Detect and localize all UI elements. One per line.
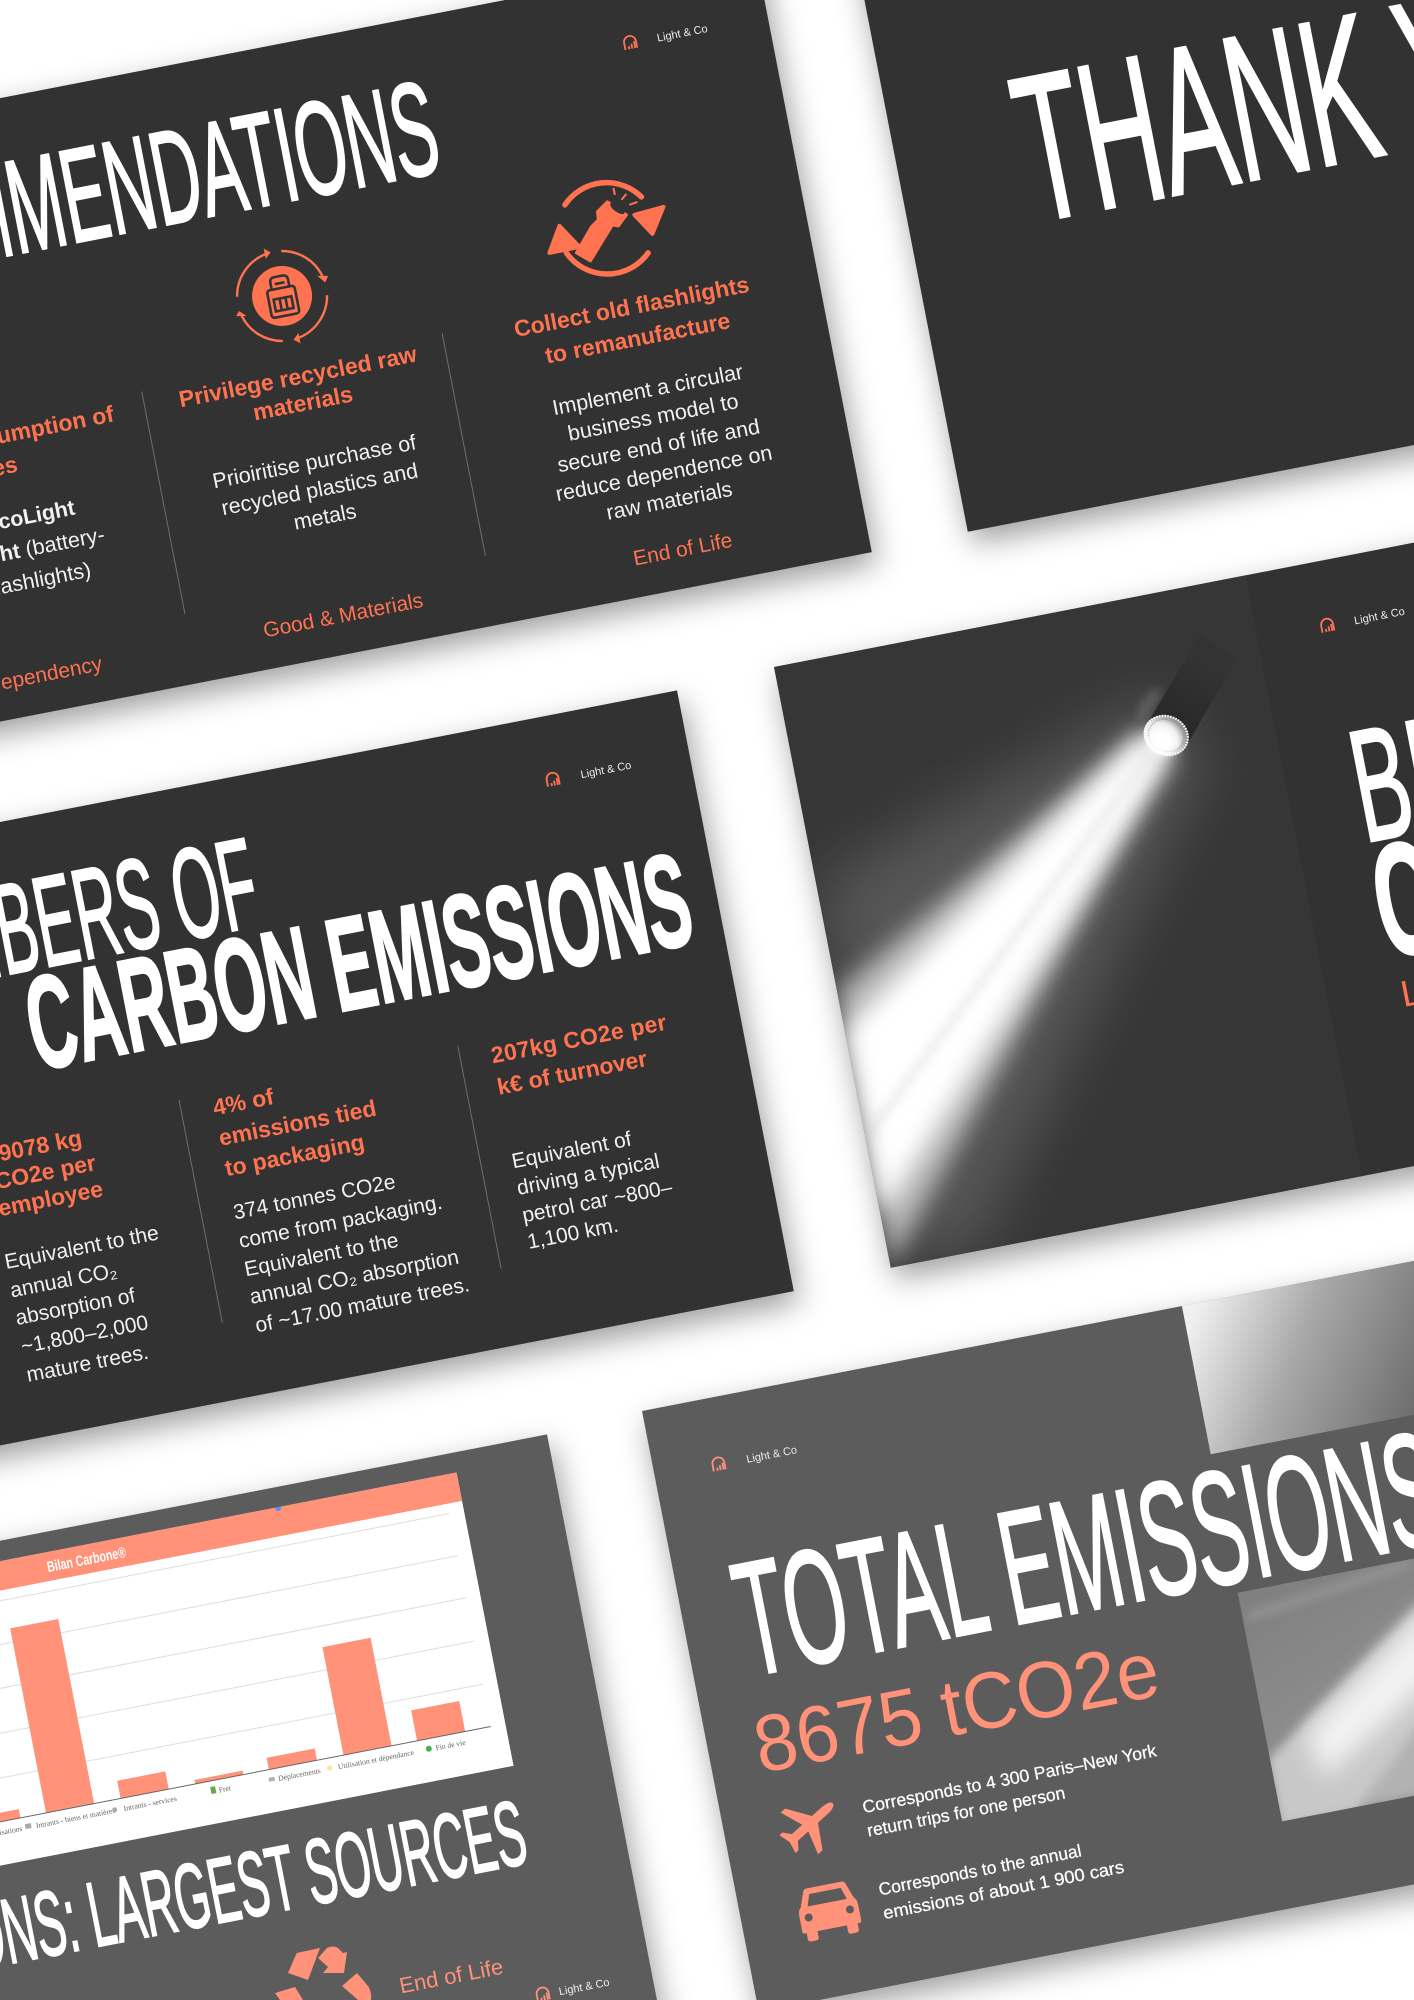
column 1: body: ~1,800–2,000 <box>19 1311 150 1358</box>
title: CARBON EMISSIONS <box>14 825 703 1098</box>
icon: recycle <box>275 1946 371 2000</box>
axis labels: Fret <box>218 1783 232 1794</box>
column 1: body <box>0 491 113 617</box>
column 2: heading: 4% of <box>211 1083 276 1120</box>
column 3: heading: Collect old flashlights <box>512 271 751 342</box>
column 1: heading <box>0 1122 105 1221</box>
tag: End of Life <box>397 1954 505 1998</box>
logo text: Light & Co <box>580 760 632 781</box>
icon: car <box>794 1879 863 1943</box>
logo icon <box>546 772 560 787</box>
column 3: body: driving a typical <box>515 1150 661 1200</box>
logo icon <box>711 1456 726 1471</box>
column 3: body: secure end of life and <box>555 414 762 477</box>
panel background <box>642 1203 1414 2000</box>
photo: top light gradient <box>1182 1203 1414 1454</box>
column 3: heading: 207kg CO2e per <box>489 1009 669 1068</box>
column 1: body: Equivalent to the <box>3 1222 161 1274</box>
big number: 8675 tCO2e <box>747 1624 1166 1790</box>
axis labels: Fin de vie <box>435 1738 467 1752</box>
panel background <box>0 690 794 1499</box>
column 2: body: Equivalent to the <box>242 1229 400 1281</box>
column 3: body: raw materials <box>604 477 734 525</box>
axis labels <box>0 1738 467 1842</box>
column 2: body: annual CO₂ absorption <box>248 1246 461 1309</box>
logo text: Light & Co <box>745 1444 798 1466</box>
bar chart <box>0 1472 514 1866</box>
panel background <box>0 1434 664 2000</box>
column 2: tag: Good & Materials <box>261 589 425 642</box>
column 3: heading: to remanufacture <box>543 307 732 369</box>
icon: flashlight circular <box>549 183 663 274</box>
column 2: body: recycled plastics and <box>219 459 420 520</box>
column 3: heading: k€ of turnover <box>495 1045 649 1100</box>
panel background <box>0 0 872 760</box>
logo text: Light & Co <box>558 1977 611 1998</box>
column 3: tag: End of Life <box>631 529 734 571</box>
column 3: body: Equivalent of <box>510 1128 634 1173</box>
column 3: body: 1,100 km. <box>525 1214 620 1254</box>
text: car comparison: Corresponds to the annual <box>877 1840 1083 1899</box>
column 3: body: business model to <box>566 389 740 446</box>
logo text: Light & Co <box>1353 606 1406 627</box>
icon: plane <box>769 1783 852 1865</box>
logo text: Light & Co <box>656 23 709 45</box>
column 2: body <box>231 1160 471 1337</box>
logo icon <box>536 1986 550 2000</box>
axis labels: Utilisation et dépendance <box>337 1748 415 1771</box>
logo icon <box>623 35 637 50</box>
axis labels: Intrants - services <box>123 1794 178 1813</box>
logo icon <box>1320 618 1334 633</box>
photo: flashlight beam <box>774 575 1362 1268</box>
column 3: heading <box>512 271 757 373</box>
photo: lower beam <box>1238 1558 1414 1822</box>
column 3: body: Implement a circular <box>550 360 745 420</box>
slide: numbers of carbon emissions <box>0 690 794 1499</box>
column 2: body: come from packaging. <box>237 1191 444 1253</box>
column 2: heading: Privilege recycled raw <box>177 341 419 412</box>
axis labels: Déplacements <box>277 1766 321 1783</box>
bars <box>0 1619 466 1822</box>
column 1: body: mature trees. <box>25 1341 150 1387</box>
column 2: heading: to packaging <box>222 1129 367 1181</box>
panel background <box>774 459 1414 1268</box>
slide: bilan carbone cover <box>774 459 1414 1268</box>
column 2: body: of ~17.00 mature trees. <box>253 1273 471 1337</box>
icon: recycled materials <box>224 238 340 354</box>
column 1: body: annual CO₂ <box>8 1259 119 1302</box>
column 2: body <box>211 430 429 548</box>
column 1: body <box>3 1222 183 1387</box>
column 2: heading <box>211 1064 384 1181</box>
column 2: body: metals <box>292 499 358 535</box>
column 3: body: reduce dependence on <box>554 441 774 506</box>
column 2: body: Prioiritise purchase of <box>211 430 418 493</box>
column 2: body: 374 tonnes CO2e <box>231 1170 397 1224</box>
column 3: heading <box>489 1009 675 1100</box>
axis labels: Intrants - biens et matières <box>35 1806 116 1830</box>
column 2: heading: emissions tied <box>217 1095 378 1151</box>
text: car comparison <box>877 1833 1126 1923</box>
slide: total emissions <box>642 1203 1414 2000</box>
column 3: body <box>510 1122 680 1254</box>
column 3: body: petrol car ~800– <box>520 1176 675 1227</box>
chart title: Bilan Carbone® <box>46 1544 127 1576</box>
slide: recommendations <box>0 0 872 760</box>
column 1: heading <box>0 400 122 506</box>
slide: largest sources <box>0 1434 664 2000</box>
column 3: body <box>537 357 780 534</box>
panel background <box>851 0 1414 532</box>
column 1: body: absorption of <box>14 1284 137 1330</box>
text: plane comparison: Corresponds to 4 300 Paris–New York <box>861 1740 1158 1817</box>
text: plane comparison: return trips for one person <box>865 1782 1067 1841</box>
text: car comparison: emissions of about 1 900 cars <box>881 1857 1126 1923</box>
column 2: heading: materials <box>251 381 355 425</box>
